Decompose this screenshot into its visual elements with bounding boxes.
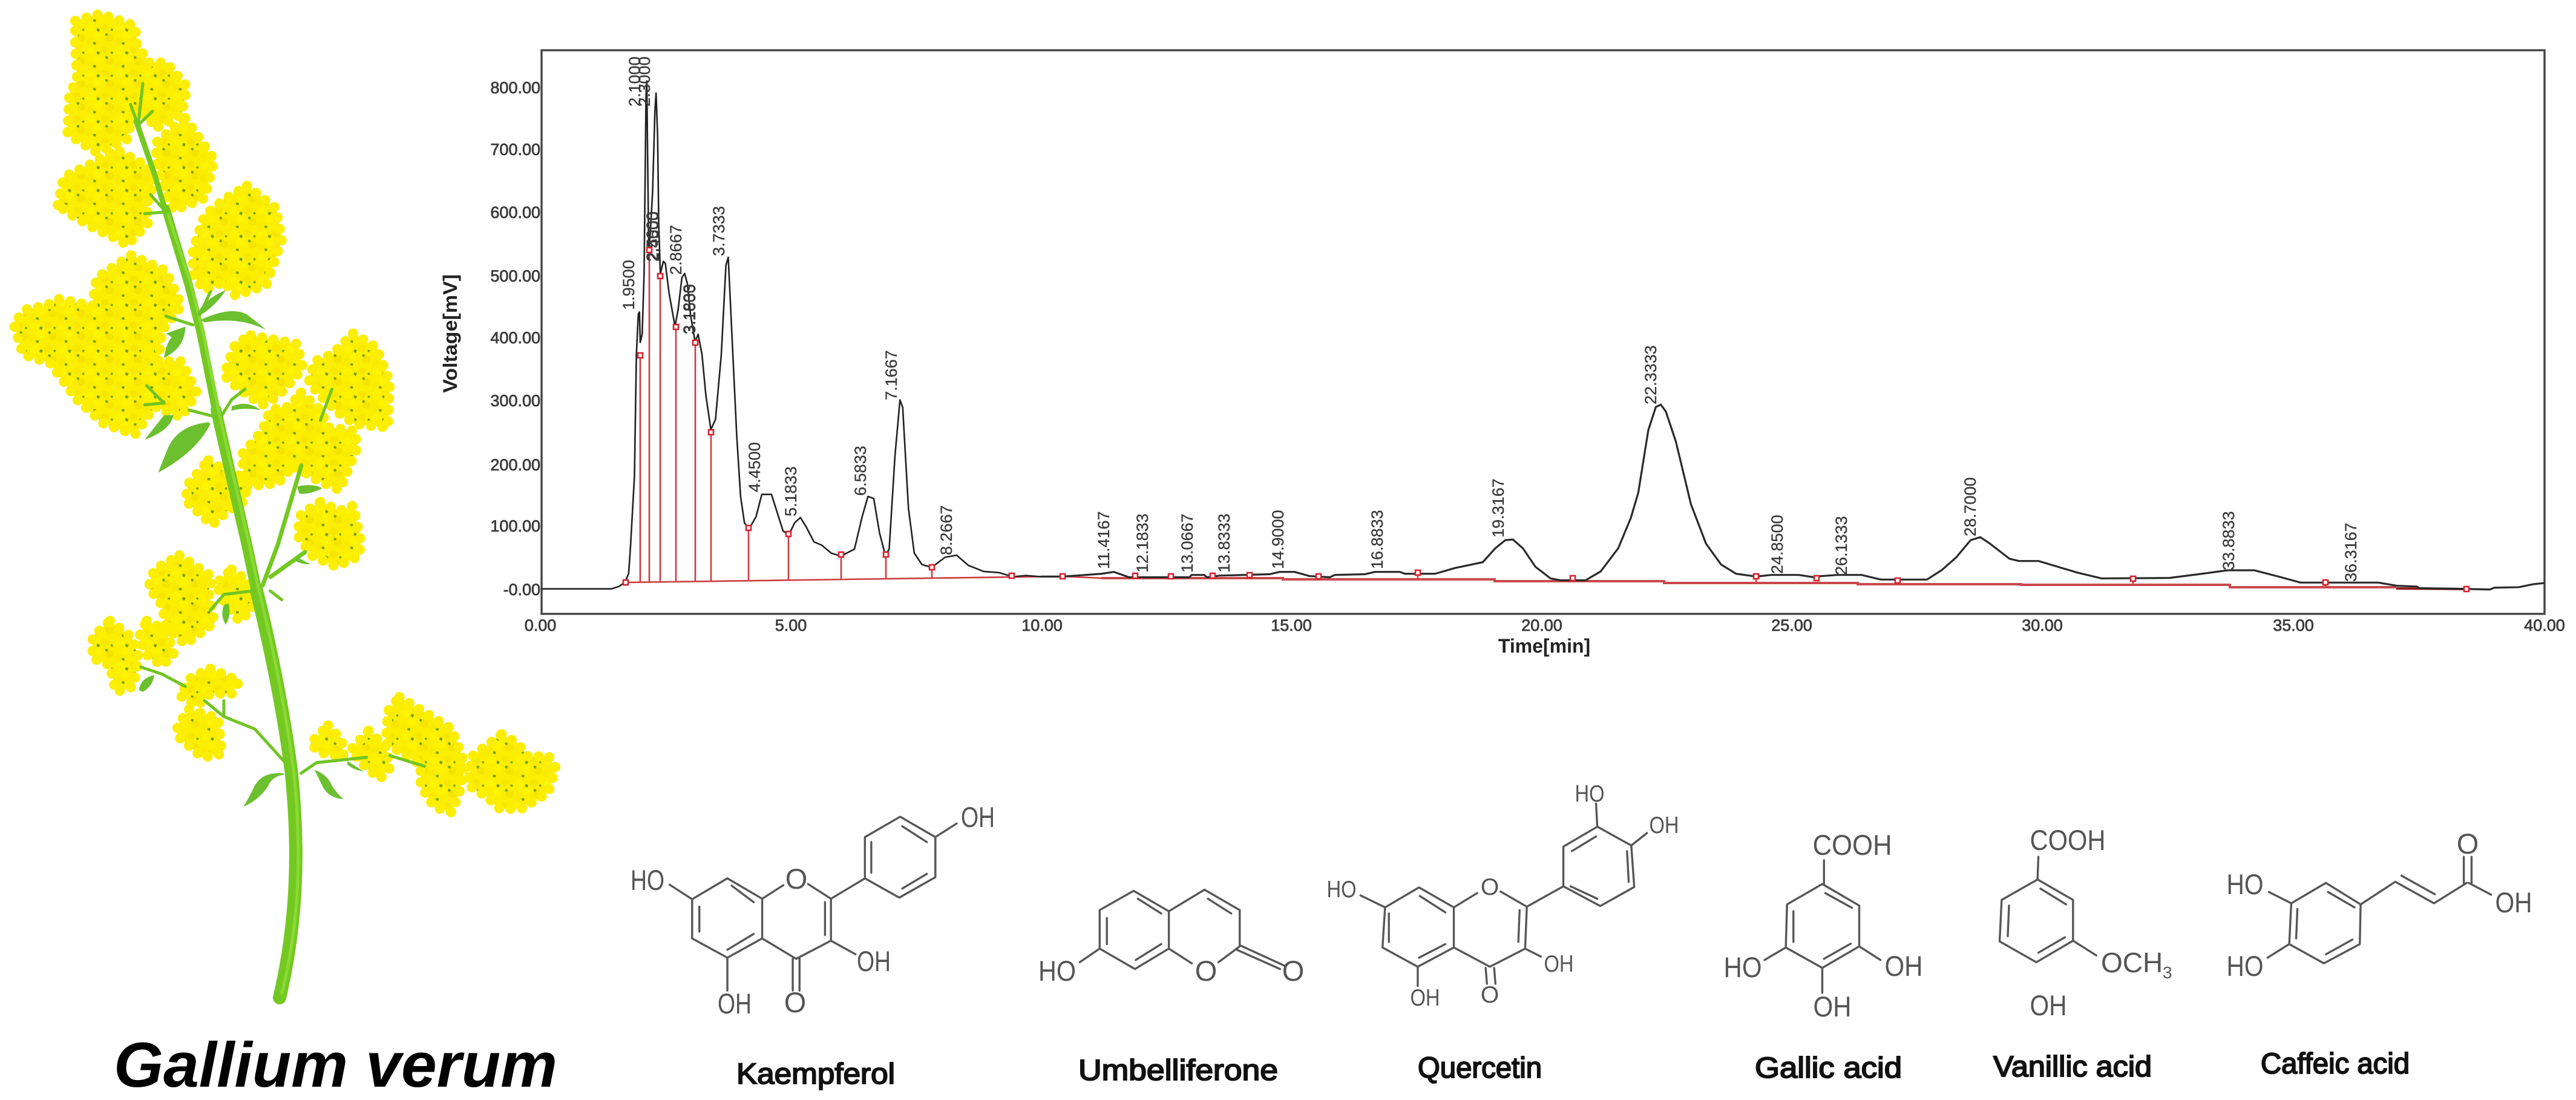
peak retention time labels: 19.3167 — [1489, 478, 1507, 538]
peak retention time labels: 3.1600 — [681, 284, 699, 334]
x axis tick labels — [525, 616, 2565, 634]
peak retention time labels: 3.7333 — [710, 206, 728, 256]
peak retention time labels: 16.8833 — [1368, 510, 1386, 569]
atom labels: O — [1481, 982, 1499, 1008]
illustration: Gallium verum plant — [13, 14, 556, 998]
y axis tick labels: 600.00 — [490, 203, 540, 222]
compound: Caffeic acid — [2227, 828, 2532, 1080]
y axis tick labels: 500.00 — [490, 267, 540, 285]
compound: Vanillic acid — [1993, 824, 2172, 1083]
atom labels: HO — [631, 864, 664, 896]
name: Gallic acid — [1755, 1052, 1902, 1084]
peak retention time labels: 13.8333 — [1215, 513, 1233, 573]
atom labels: OCH — [2101, 947, 2163, 978]
y axis tick labels: 200.00 — [490, 456, 540, 474]
peak retention time labels: 12.1833 — [1133, 513, 1152, 573]
atom labels: COOH — [2030, 824, 2106, 856]
compound: Umbelliferone — [1038, 890, 1304, 1087]
y axis title: Voltage[mV] — [439, 274, 461, 393]
atom labels: O — [1282, 955, 1304, 987]
y axis tick labels: 300.00 — [490, 392, 540, 410]
peak retention time labels — [620, 56, 2360, 582]
species name: Gallium verum — [114, 1030, 557, 1100]
atom labels: HO — [1326, 877, 1357, 903]
y axis tick labels: 800.00 — [490, 79, 540, 97]
atom labels: HO — [1723, 951, 1762, 983]
y axis tick labels: -0.00 — [503, 581, 540, 599]
peak retention time labels: 13.0667 — [1178, 513, 1196, 573]
peak retention time labels: 2.5000 — [643, 211, 661, 262]
main stem — [136, 121, 298, 998]
atom labels — [1038, 955, 1304, 987]
atom labels: O — [2457, 828, 2479, 860]
atom labels: HO — [2227, 950, 2263, 982]
atom labels: OH — [1410, 985, 1440, 1011]
peak retention time labels: 28.7000 — [1961, 477, 1979, 536]
peak retention time labels: 6.5833 — [851, 446, 870, 496]
peak retention time labels: 4.4500 — [746, 442, 764, 492]
y axis tick labels: 100.00 — [490, 517, 540, 535]
atom labels: HO — [1038, 955, 1076, 987]
atom labels: OH — [1884, 950, 1923, 982]
peak retention time labels: 3.1833 — [680, 284, 698, 334]
compound: Kaempferol — [631, 801, 995, 1090]
atom labels — [2030, 824, 2172, 1021]
peak retention time labels: 2.4500 — [644, 211, 663, 262]
structure bonds — [1999, 857, 2096, 962]
x axis tick labels: 40.00 — [2524, 616, 2565, 634]
structure bonds — [1765, 860, 1881, 993]
y axis tick labels: 700.00 — [490, 140, 540, 159]
name: Vanillic acid — [1993, 1051, 2152, 1083]
peak retention time labels: 14.9000 — [1269, 510, 1287, 569]
lower branches and leaves — [139, 557, 425, 807]
y axis tick labels — [490, 79, 540, 599]
atom labels: O — [784, 986, 806, 1018]
x axis tick labels: 5.00 — [775, 616, 807, 634]
peak retention time labels: 2.8667 — [667, 225, 685, 275]
atom labels: OH — [857, 945, 891, 977]
plot frame — [542, 50, 2545, 614]
x axis tick labels: 15.00 — [1271, 616, 1312, 634]
chart: HPLC chromatogram — [439, 50, 2565, 657]
peak retention time labels: 7.1667 — [882, 350, 900, 400]
atom labels: O — [1195, 955, 1217, 987]
peak retention time labels: 2.3000 — [635, 56, 654, 107]
structure bonds — [670, 817, 957, 990]
structure bonds — [1360, 803, 1647, 986]
name: Umbelliferone — [1078, 1055, 1278, 1087]
lower flower clusters — [93, 556, 556, 812]
x axis tick labels: 30.00 — [2022, 616, 2063, 634]
structure bonds — [2267, 857, 2491, 963]
name: Kaempferol — [736, 1058, 895, 1090]
peak retention time labels: 1.9500 — [620, 260, 638, 310]
red integration baseline and drop lines — [629, 250, 2466, 589]
atom labels: HO — [1575, 781, 1605, 807]
peak retention time labels: 8.2667 — [937, 505, 955, 555]
atom labels: OH — [718, 987, 752, 1019]
x axis title: Time[min] — [1498, 635, 1590, 657]
atom labels: O — [785, 863, 807, 895]
peak retention time labels: 24.8500 — [1768, 515, 1786, 574]
peak retention time labels: 22.3333 — [1642, 345, 1660, 404]
atom labels: OH — [961, 801, 995, 833]
atom labels: 3 — [2163, 963, 2172, 982]
y axis tick labels: 400.00 — [490, 329, 540, 347]
side branch to upper right cluster — [263, 466, 305, 585]
peak retention time labels: 36.3167 — [2342, 522, 2360, 582]
atom labels: OH — [1650, 812, 1679, 838]
upper branches and leaves — [131, 84, 332, 494]
atom labels: COOH — [1813, 829, 1892, 861]
peak boundary markers — [623, 248, 2469, 591]
chromatogram trace — [542, 81, 2545, 590]
atom labels: HO — [2227, 868, 2263, 900]
atom labels — [1326, 781, 1679, 1011]
x axis tick labels: 35.00 — [2273, 616, 2314, 634]
name: Quercetin — [1418, 1052, 1542, 1084]
atom labels: OH — [2030, 989, 2067, 1021]
atom labels: O — [1481, 874, 1499, 900]
x axis tick labels: 0.00 — [525, 616, 556, 634]
structure bonds — [1080, 890, 1284, 969]
name: Caffeic acid — [2261, 1048, 2410, 1080]
atom labels — [1723, 829, 1923, 1023]
peak retention time labels: 2.1000 — [626, 56, 644, 107]
peak retention time labels: 11.4167 — [1095, 511, 1113, 569]
peak retention time labels: 5.1833 — [782, 466, 800, 516]
x axis tick labels: 20.00 — [1521, 616, 1562, 634]
atom labels — [631, 801, 995, 1019]
compound: Gallic acid — [1723, 829, 1923, 1084]
peak retention time labels: 26.1333 — [1832, 516, 1850, 575]
x axis tick labels: 10.00 — [1021, 616, 1063, 634]
atom labels: OH — [2496, 886, 2532, 918]
atom labels: OH — [1544, 951, 1573, 977]
upper flower clusters — [13, 14, 390, 567]
peak retention time labels: 33.8833 — [2220, 511, 2238, 570]
compound: Quercetin — [1326, 781, 1679, 1084]
atom labels — [2227, 828, 2532, 982]
atom labels: OH — [1813, 990, 1852, 1023]
x axis tick labels: 25.00 — [1771, 616, 1812, 634]
